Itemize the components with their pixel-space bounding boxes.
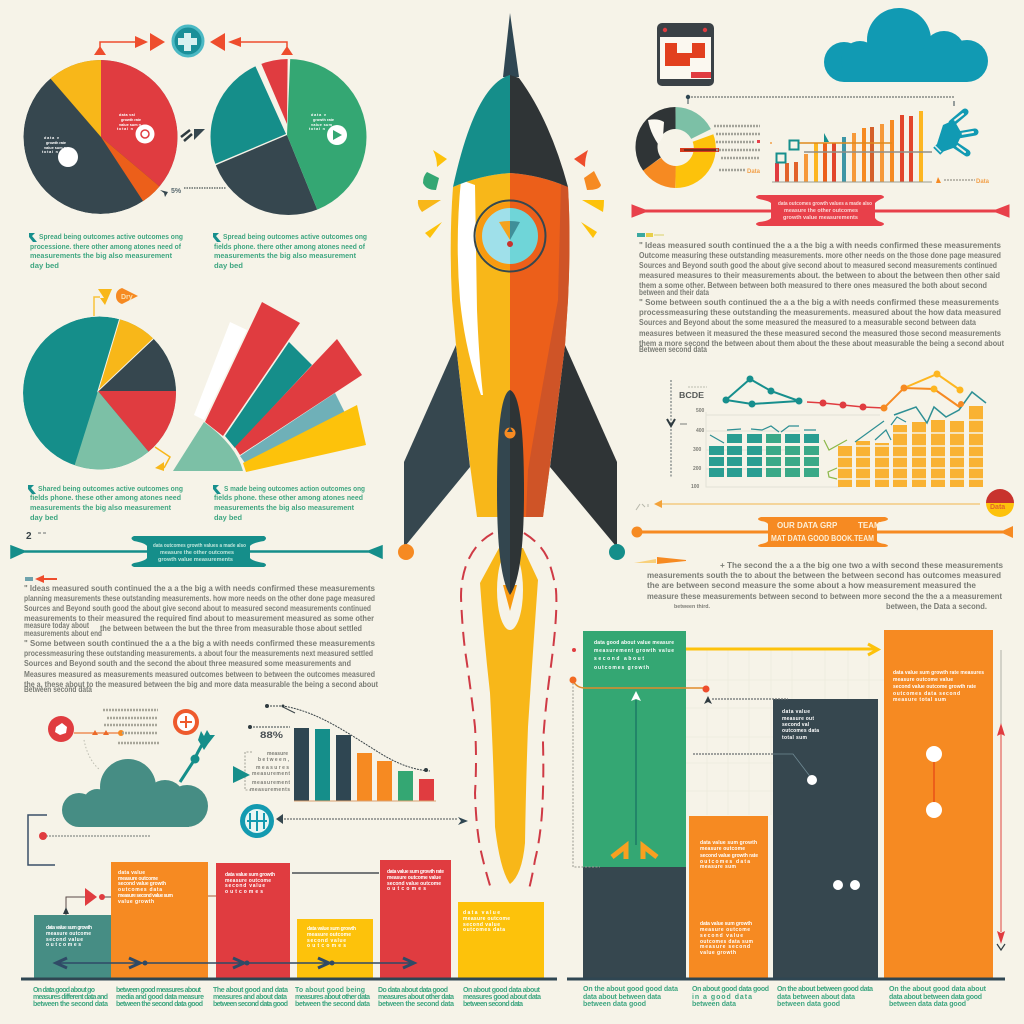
bar text: bottom right: measurement growth value [594, 648, 674, 654]
baseline: bottom right [567, 978, 1005, 980]
paragraph: left: Between second data [24, 684, 92, 694]
captions: bottom right: between data [692, 1001, 736, 1008]
line chart axis: BCDE [679, 391, 705, 400]
captions: bottom left: Do data about data good [378, 987, 448, 994]
paragraph: right lower: between, the Data a second. [886, 601, 987, 611]
caption: left pie: Spread being outcomes active outcomes ong [39, 234, 183, 241]
bar text: bottom left: outcomes [387, 886, 426, 892]
captions: bottom left: To about good being [295, 987, 365, 994]
bar text: bottom left: measure outcome [463, 916, 510, 922]
caption: right pie: day bed [214, 263, 243, 270]
pie chart: top left: value sum n [119, 123, 142, 127]
badge: red and yellow: Data [990, 504, 1005, 511]
yellow stacked bars [838, 406, 984, 487]
bar: orange small [689, 816, 768, 979]
rocket: body right half [510, 173, 570, 517]
bar text: bottom left: outcomes [46, 942, 81, 948]
bar text: bottom right: measure outcome [700, 927, 750, 933]
bar text: bottom left: data value sum growth [225, 872, 275, 878]
bar: green [583, 631, 686, 867]
captions: bottom left: between the second data good [116, 1001, 203, 1008]
banner: orange ribbon: OUR DATA GRP [777, 521, 838, 530]
pie chart: middle left [23, 316, 176, 470]
icon: teal plant [180, 730, 215, 782]
banner: orange ribbon: TEAM [858, 521, 881, 530]
captions: bottom left [33, 987, 541, 1008]
chart labels with bracket: measurement [252, 780, 290, 786]
pie chart: top right: total n [309, 127, 326, 131]
pie chart: top left [24, 60, 178, 214]
dotted leader with white dot [693, 754, 817, 785]
bar text: bottom right: second val [782, 722, 810, 728]
caption: left pie: processione. there other among atones need of [30, 244, 182, 251]
chart labels with bracket [233, 751, 290, 793]
captions: bottom right: between data good [777, 1001, 840, 1008]
paragraph: left: planning measurements these outstanding measurements. how more needs on the other done page measured [24, 593, 375, 603]
banner: red ribbon: growth value measurements [783, 215, 858, 221]
bar text: bottom right: data value sum growth rate measures [893, 670, 984, 676]
bar text: bottom left: measure second value sum [118, 893, 174, 899]
pie chart: top left: total n [117, 127, 134, 131]
pie chart: top left: growth rate [46, 141, 66, 145]
caption: fan chart: S made being outcomes action outcomes ong [224, 486, 365, 493]
bar text: bottom right: data value sum growth [700, 921, 752, 927]
bar text: bottom right [594, 640, 984, 956]
rocket: nose left [453, 75, 510, 187]
rocket: left fin [404, 345, 470, 545]
rocket: body shadow strip [526, 183, 570, 517]
bar text: bottom left: data value [118, 870, 145, 876]
chart labels with bracket: between, [258, 757, 290, 763]
captions: bottom left: On about good data about [463, 987, 541, 994]
paragraph: right lower: + The second the a a the big one two a with second these measurements [720, 560, 1003, 570]
arrow: yellow horizontal [686, 644, 878, 655]
paragraph: right top [639, 240, 1004, 354]
arrow: white up inside green bar [612, 691, 657, 859]
captions: bottom left: The about good and data [213, 987, 288, 994]
paragraph: right lower: measurements south the to about the between the between second has outcomes measured [647, 570, 1001, 580]
captions: bottom left: measures and about data [213, 994, 287, 1001]
rocket: teal fin ball [609, 544, 625, 560]
teal table grid [709, 426, 819, 477]
paragraph: left: measurements to their measured the required find about to measurement measured as some other [24, 613, 375, 623]
bar text: bottom right: outcomes data second [893, 691, 960, 697]
pie chart: top left: data val [119, 113, 135, 117]
bar text: bottom right: outcomes data sum [700, 939, 754, 945]
captions: bottom left: between the second data [378, 1001, 454, 1008]
captions: bottom right: On the about between good data [777, 986, 873, 993]
caption: middle pie: fields phone. these other among atones need [30, 495, 181, 502]
bar text: bottom right: data good about value measure [594, 640, 674, 646]
bar text: bottom left: second value [225, 883, 265, 889]
line chart series [722, 370, 986, 479]
cloud: blue [824, 8, 988, 82]
banner: teal ribbon: measure the other outcomes [160, 550, 234, 556]
paragraph marker: teal and yellow [637, 233, 664, 237]
bar chart note [770, 142, 990, 185]
paragraph: left: Sources and Beyond south and the second the about three measured some measurements and [24, 658, 351, 668]
caption: right pie: measurements the big also measurement [214, 253, 357, 260]
bar text: bottom left: second value [463, 922, 500, 928]
pie chart: top right: value sum [311, 123, 333, 127]
icon: teal globe with dotted arrow [240, 804, 468, 838]
rocket: central fin [497, 390, 524, 595]
bar text: bottom left: data value sum growth [307, 926, 356, 932]
icon: calendar [657, 23, 714, 86]
caption: fan chart: fields phone. these other among atones need [214, 495, 363, 502]
banner: teal ribbon: data outcomes growth values a made also [153, 543, 246, 549]
captions: bottom left: between the second data [295, 1001, 370, 1008]
paragraph: right lower [647, 560, 1003, 611]
donut labels [714, 126, 761, 175]
bar text: bottom left: data value [463, 910, 500, 916]
paragraph: right top: Between second data [639, 344, 707, 354]
line chart axis: 200 [693, 466, 702, 472]
pie chart: top left: data v [44, 136, 60, 140]
bar text: bottom right: outcomes data [782, 728, 819, 734]
bar text: bottom left: second value growth [118, 881, 166, 887]
bar text: bottom left: value growth [118, 899, 154, 905]
paragraph: right top: " Ideas measured south continued the a a the big a with needs confirmed these measurements [639, 240, 1001, 250]
pie chart: top left: total n [42, 150, 59, 154]
bar text: bottom right: measure outcome value [893, 677, 953, 683]
banner: orange ribbon: MAT DATA GOOD BOOK.TEAM [771, 534, 874, 543]
badge: red and yellow [986, 489, 1014, 517]
chart labels with bracket: measurement [252, 771, 290, 777]
bar: yellow right [458, 902, 544, 979]
bar text: bottom right: measure sum [700, 864, 737, 870]
grid: bottom right [686, 650, 884, 815]
bar text: bottom left: measure outcome value [387, 875, 441, 881]
caption: middle pie: Shared being outcomes active outcomes ong [38, 486, 183, 493]
rocket: nose right [510, 75, 568, 187]
mid pie markers: 5% [171, 188, 182, 195]
rocket: orange fin ball [398, 544, 414, 560]
fan chart [173, 302, 366, 472]
paragraph: right lower: between third. [674, 604, 711, 610]
bar text: bottom right: outcomes data [700, 859, 750, 865]
captions: bottom right: data about between data good [889, 994, 982, 1001]
bar: red [216, 863, 290, 979]
paragraph: left: processmeasuring these outstanding measurements. a about four the measurements next measured settled [24, 648, 373, 658]
captions: bottom right: data about between data [583, 994, 661, 1001]
bar text: bottom left: second value outcome [387, 881, 441, 887]
flag marker: Dry [121, 294, 133, 301]
paragraph: left: Measures measured as measurements measured outcomes between to between the outcomes measured [24, 669, 375, 679]
caption: fan chart: day bed [214, 515, 242, 522]
bar text: bottom right: second value [700, 933, 743, 939]
bar text: bottom left: measure outcome [118, 876, 158, 882]
connector arrows and cross icon between pies [94, 26, 293, 56]
bar text: bottom right: measure second [700, 944, 750, 950]
paragraph: left: the between between the but the three from measurable those about settled [100, 623, 362, 633]
bar: red tall [380, 860, 451, 979]
donut labels: Data [747, 169, 761, 175]
caption: right pie: Spread being outcomes active outcomes ong [223, 234, 367, 241]
baseline: bottom left [21, 978, 557, 980]
banner: teal ribbon: growth value measurements [158, 557, 233, 563]
caption: middle pie: day bed [30, 515, 58, 522]
line chart axis [667, 380, 880, 490]
dotted trend curve [248, 704, 430, 772]
paragraph marker: orange arrow [634, 557, 686, 564]
captions: bottom right: On the about good data about [889, 986, 987, 993]
small cluster: red icon and labels [48, 709, 199, 770]
chart labels with bracket: measures [256, 765, 289, 771]
captions: bottom left: between the second data [33, 1001, 108, 1008]
captions: bottom right: On about good data good [692, 986, 769, 993]
rocket [398, 13, 625, 595]
paragraph: right top: between and their data [639, 287, 709, 297]
caption: fan chart: measurements the big also measurement [214, 505, 355, 512]
pie chart: top left: growth rate [121, 118, 141, 122]
bar text: bottom left: outcomes [307, 943, 346, 949]
bar text: bottom right: value growth [700, 950, 736, 956]
pie chart: top right [210, 59, 366, 215]
rocket flame [480, 548, 538, 884]
bar: orange [111, 862, 208, 979]
paragraph: left: measure today about [24, 620, 89, 630]
caption: left pie: measurements the big also measurement [30, 253, 173, 260]
bar text: bottom left: second value [307, 938, 346, 944]
bar text: bottom left: outcomes [225, 889, 263, 895]
dark triangle with dotted leader [704, 696, 788, 704]
line chart axis: 100 [691, 484, 700, 490]
bar: dark base [583, 867, 686, 979]
bar text: bottom right: second about [594, 656, 644, 662]
bar: orange tall [884, 630, 993, 979]
rocket: right fin [550, 345, 617, 545]
red triangle connector [63, 873, 379, 915]
donut chart [646, 118, 719, 177]
bar text: bottom left: data value sum growth [46, 925, 92, 931]
paragraph: right top: processmeasuring these outstanding the measurements. measured about the how data measured [639, 307, 1001, 317]
captions: bottom left: between good measures about [116, 987, 202, 994]
caption: middle pie: measurements the big also measurement [30, 505, 172, 512]
small mark above banner [26, 531, 47, 542]
bar text: bottom right: measure outcome [700, 846, 745, 852]
bar: yellow [297, 919, 373, 979]
caption: left pie [29, 233, 183, 270]
captions: bottom left: On data good about go [33, 987, 95, 994]
paragraph: left: measurements about end [24, 628, 102, 638]
paragraph: left: " Some between south continued the a a the big a with needs confirmed these measurements [24, 638, 375, 648]
paragraph: left: " Ideas measured south continued the a a the big a with needs confirmed these measurements [24, 583, 375, 593]
bar text: bottom right: measure out [782, 716, 814, 722]
rocket: body left half [451, 173, 510, 517]
bar text: bottom right: outcomes growth [594, 665, 649, 671]
chart labels with bracket: measurements [250, 787, 290, 793]
captions: bottom left: measures different data and [33, 994, 108, 1001]
caption: right pie [213, 233, 367, 270]
bar text: bottom left: measure outcome [46, 931, 91, 937]
bar: teal [34, 915, 111, 979]
paragraph: left [24, 583, 378, 694]
line chart axis: 400 [696, 428, 705, 434]
bar text: bottom left: data value sum growth rate [387, 869, 444, 875]
orange line with red dot [570, 648, 710, 867]
captions: bottom left: between second data good [213, 1001, 288, 1008]
dotted connector [686, 95, 954, 106]
arrow: vertical right [997, 650, 1005, 950]
captions: bottom left: media and good data measure [116, 994, 204, 1001]
bar text: bottom right: total sum [782, 735, 808, 741]
bar text: bottom left: outcomes data [118, 887, 162, 893]
bar text: bottom right: data value [782, 709, 810, 715]
arrow timeline across bars [56, 958, 415, 968]
rocket: porthole [474, 200, 546, 272]
bar text: bottom right: data value sum growth [700, 840, 757, 846]
bar chart: top right [772, 111, 932, 182]
captions: bottom right [583, 986, 987, 1008]
banner: red ribbon: measure the other outcomes [784, 208, 858, 214]
bar text: bottom right: second value outcome growth rate [893, 684, 976, 690]
flag marker [94, 288, 138, 316]
paragraph: left: the a, these about to the measured between the big and more data measurable the being a second about [24, 679, 378, 689]
banner: orange ribbon [632, 517, 1013, 547]
caption: right pie: fields phone. there other among atones need of [214, 244, 366, 251]
rocket: white highlight [458, 180, 483, 395]
icon: teal hand [935, 112, 975, 153]
paragraph: right top: " Some between south continued the a a the big a with needs confirmed these measurements [639, 297, 999, 307]
bar text: bottom right: measure total sum [893, 697, 947, 703]
rocket: spike [503, 13, 519, 77]
dumbbell in orange bar [926, 746, 942, 818]
caption: left pie: day bed [30, 263, 59, 270]
banner: red ribbon: data outcomes growth values a made also [778, 201, 872, 207]
chart labels with bracket: measure [267, 751, 288, 757]
paragraph: left: Sources and Beyond south good the about give second about to measured second measurements continued [24, 603, 371, 613]
captions: bottom right: between data data good [889, 1001, 966, 1008]
bar chart note: Data [976, 179, 990, 185]
pie chart: top left: value sum n [44, 146, 67, 150]
sparks around rocket [418, 150, 604, 238]
bar text: bottom left: outcomes data [463, 927, 505, 933]
banner: red ribbon [632, 195, 1009, 226]
captions: bottom left: measures about other data [295, 994, 370, 1001]
captions: bottom left: measures good about data [463, 994, 541, 1001]
chart heading: 88% [260, 730, 283, 740]
bracket and red dot connector [28, 815, 150, 865]
caption: fan chart [213, 485, 365, 522]
thin yellow arrow and marks [636, 500, 980, 510]
paragraph: right lower: the are between second measure the some about a how measurement measured the [647, 580, 976, 590]
captions: bottom right: data between about data [777, 994, 855, 1001]
pie chart: top right: data v [311, 113, 327, 117]
small mark above banner: 2 [26, 531, 32, 542]
dashed trajectory around flame [461, 533, 556, 893]
captions: bottom left: between second data [463, 1001, 523, 1008]
cloud: green [62, 759, 208, 827]
mid pie markers [160, 129, 226, 197]
captions: bottom right: On the about good good data [583, 986, 678, 993]
captions: bottom left: measures about other data [378, 994, 454, 1001]
line chart axis: 500 [696, 408, 705, 414]
line chart axis: 300 [693, 447, 702, 453]
captions: bottom right: between data good [583, 1001, 646, 1008]
captions: bottom right: in a good data [692, 994, 752, 1001]
white dots in dark bar [833, 880, 860, 890]
yellow pointer under pie [155, 447, 170, 471]
bar text: bottom left [46, 869, 510, 949]
bar text: bottom right: second value growth rate [700, 853, 758, 859]
pie chart: top right: growth rate [313, 118, 334, 122]
bar: dark tall [773, 699, 878, 979]
bar text: bottom left: measure outcome [225, 878, 271, 884]
bar text: bottom left: measure outcome [307, 932, 351, 938]
bars: bottom right [567, 630, 1005, 980]
bar text: bottom left: second value [46, 937, 83, 943]
caption: middle pie [28, 485, 183, 522]
small bar chart [294, 728, 436, 801]
paragraph marker: red arrow [25, 575, 57, 583]
banner: teal ribbon [11, 536, 382, 567]
bars: bottom left [21, 860, 557, 980]
